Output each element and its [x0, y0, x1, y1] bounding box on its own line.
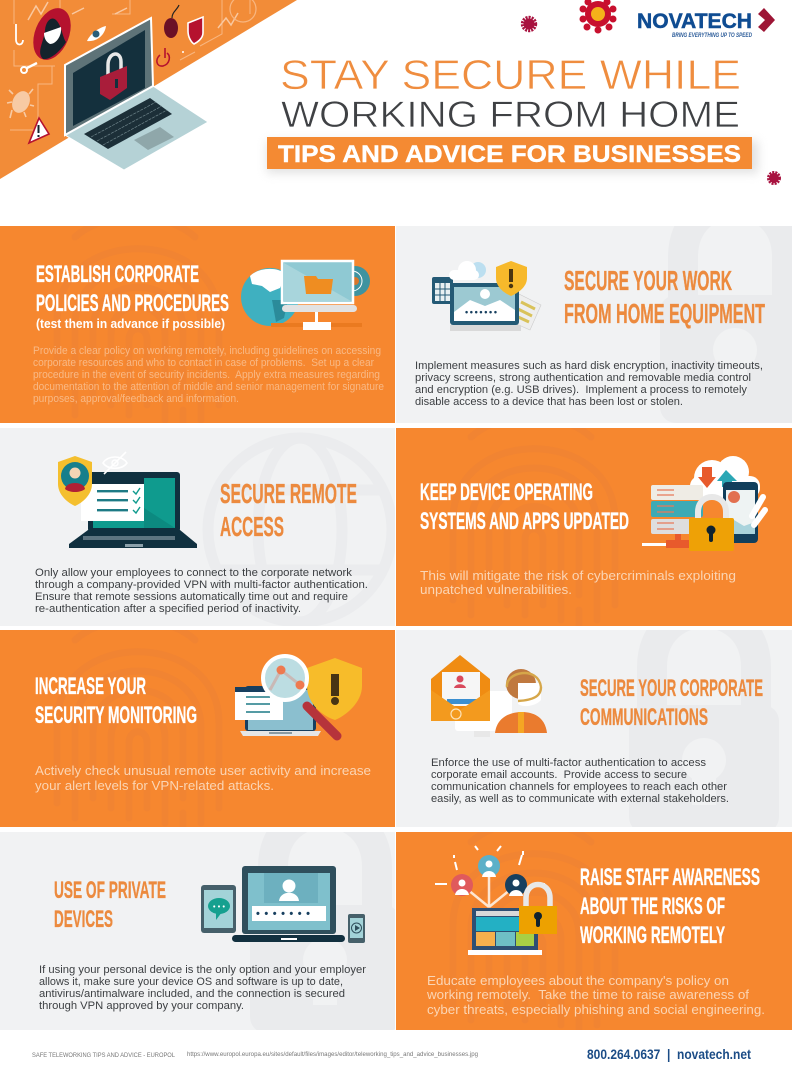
body text: [420, 568, 736, 597]
illustration: laptop with padlock: [65, 18, 208, 170]
body text: Only allow your employees to connect to the corporate network: [35, 567, 352, 579]
icon: key: [21, 63, 37, 73]
body text: and encryption (e.g. USB drives). Implement a process to remotely: [415, 384, 747, 396]
footer: contact details: 800.264.0637 | novatech.net: [587, 1047, 751, 1062]
body text: purposes, approval/feedback and information.: [33, 393, 239, 405]
body text: through VPN approved by your company.: [39, 1000, 244, 1012]
globe watermark: [208, 438, 392, 622]
footer: source credit: https://www.europol.europa.eu/sites/default/files/images/editor/teleworking_tips_and_advice_businesses.jpg: [187, 1052, 478, 1058]
body text: Provide a clear policy on working remotely, including guidelines on accessing: [33, 345, 381, 357]
heading: [35, 673, 197, 729]
heading: [36, 261, 229, 317]
panel: increase your security monitoring: [0, 620, 395, 833]
heading: [54, 877, 166, 933]
body text: through a company-provided VPN with multi-factor authentication.: [35, 579, 368, 591]
panel: establish corporate policies: [0, 217, 395, 430]
title: [280, 51, 741, 135]
body text: [415, 360, 763, 408]
logo: Novatech: BRING EVERYTHING UP TO SPEED: [672, 33, 753, 39]
icon: hacker: [26, 3, 78, 65]
icon: laptop with shield: [58, 452, 197, 548]
body text: [35, 763, 371, 793]
footer: source credit: [32, 1052, 478, 1059]
body text: [431, 757, 729, 805]
heading: USE OF PRIVATE: [54, 877, 166, 904]
icon: laptop, tablet and phone: •••••••: [256, 908, 310, 920]
panel: secure your work from home equipment: [396, 226, 792, 423]
body text: Actively check unusual remote user activity and increase: [35, 763, 371, 778]
body text: [426, 973, 765, 1017]
heading: ACCESS: [220, 511, 284, 542]
body text: [39, 964, 366, 1012]
body text: Enforce the use of multi-factor authentication to access: [431, 757, 706, 769]
icon: secure workstation: [432, 261, 541, 331]
body text: Ensure that remote sessions automatically time out and require: [35, 591, 348, 603]
decorative virus: large: [580, 0, 616, 34]
body text: documentation to the attention of middle and senior management for signature: [33, 381, 384, 393]
panel: use of private devices: [0, 832, 395, 1030]
heading: [420, 479, 629, 535]
icon: connected staff, laptop and padlock: [435, 846, 557, 955]
body text: easily, as well as to communicate with external stakeholders.: [431, 793, 729, 805]
heading: INCREASE YOUR: [35, 673, 146, 700]
icon: laptop, tablet and phone: [201, 866, 365, 943]
icon: bug: [7, 89, 34, 118]
title: WORKING FROM HOME: [281, 94, 740, 135]
body text: If using your personal device is the only option and your employer: [39, 964, 366, 976]
body text: Implement measures such as hard disk encryption, inactivity timeouts,: [415, 360, 763, 372]
footer: source credit: SAFE TELEWORKING TIPS AND ADVICE - EUROPOL: [32, 1052, 175, 1059]
body text: working remotely. Take the time to raise awareness of: [426, 987, 749, 1002]
header banner: orange diagonal with security icons: [0, 0, 297, 179]
panel: raise staff awareness: [396, 822, 792, 1035]
body text: cyber threats, especially phishing and social engineering.: [427, 1002, 765, 1017]
heading: KEEP DEVICE OPERATING: [420, 479, 593, 506]
icon: eye: [87, 26, 106, 41]
body text: re-authentication after a specified period of inactivity.: [35, 603, 301, 615]
heading: SECURITY MONITORING: [35, 702, 197, 729]
icon: fish hook: [16, 24, 23, 44]
icon: globe and monitor: [241, 261, 370, 330]
heading: ESTABLISH CORPORATE: [36, 261, 199, 288]
heading: [564, 265, 765, 329]
subheading: (test them in advance if possible): [36, 317, 225, 331]
panel: secure your corporate communications: [396, 630, 792, 827]
body text: [33, 345, 384, 405]
heading: DEVICES: [54, 906, 113, 933]
icon: secure workstation: •••••••: [465, 307, 497, 317]
heading: SECURE REMOTE: [220, 478, 357, 509]
subtitle banner: [267, 137, 758, 173]
body text: corporate resources and who to contact in case of problems. Set up a clear: [33, 357, 374, 369]
body text: [35, 567, 368, 615]
body text: This will mitigate the risk of cybercriminals exploiting: [420, 568, 736, 583]
heading: POLICIES AND PROCEDURES: [36, 290, 229, 317]
body text: disable access to a device that has been lost or stolen.: [415, 396, 683, 408]
body text: antivirus/antimalware included, and the connection is secured: [39, 988, 345, 1000]
logo: Novatech: NOVATECH: [637, 10, 752, 33]
body text: privacy screens, strong authentication and removable media control: [415, 372, 751, 384]
body text: your alert levels for VPN-related attacks.: [35, 778, 274, 793]
icon: shield: [188, 17, 203, 44]
subtitle banner: TIPS AND ADVICE FOR BUSINESSES: [278, 141, 741, 168]
heading: [220, 478, 357, 542]
decorative virus: right: [768, 172, 780, 184]
panel: secure remote access: [0, 428, 395, 626]
icon: envelope and support agent: [431, 655, 547, 737]
body text: procedure in the event of security incidents. Apply extra measures regarding: [33, 369, 380, 381]
icon: bomb: [164, 5, 179, 38]
body text: allows it, make sure your device OS and software is up to date,: [39, 976, 343, 988]
icon: warning triangle: [29, 118, 49, 143]
icon: servers, cloud, phone and padlock: [642, 456, 765, 551]
title: STAY SECURE WHILE: [280, 51, 741, 98]
heading: SYSTEMS AND APPS UPDATED: [420, 508, 629, 535]
decorative virus: small: [522, 18, 536, 30]
icon: power: [157, 48, 169, 66]
logo: Novatech: [637, 8, 775, 39]
body text: communication channels for employees to reach each other: [431, 781, 727, 793]
icon: laptop, tablet and phone: •••: [213, 904, 226, 911]
body text: corporate email accounts. Provide access to secure: [431, 769, 687, 781]
heading: [580, 675, 763, 731]
body text: unpatched vulnerabilities.: [420, 582, 572, 597]
panel: keep device operating systems updated: [396, 417, 792, 630]
heading: [580, 864, 760, 949]
icon: magnifier, laptop and alert shield: [235, 656, 362, 736]
body text: Educate employees about the company's policy on: [427, 973, 729, 988]
